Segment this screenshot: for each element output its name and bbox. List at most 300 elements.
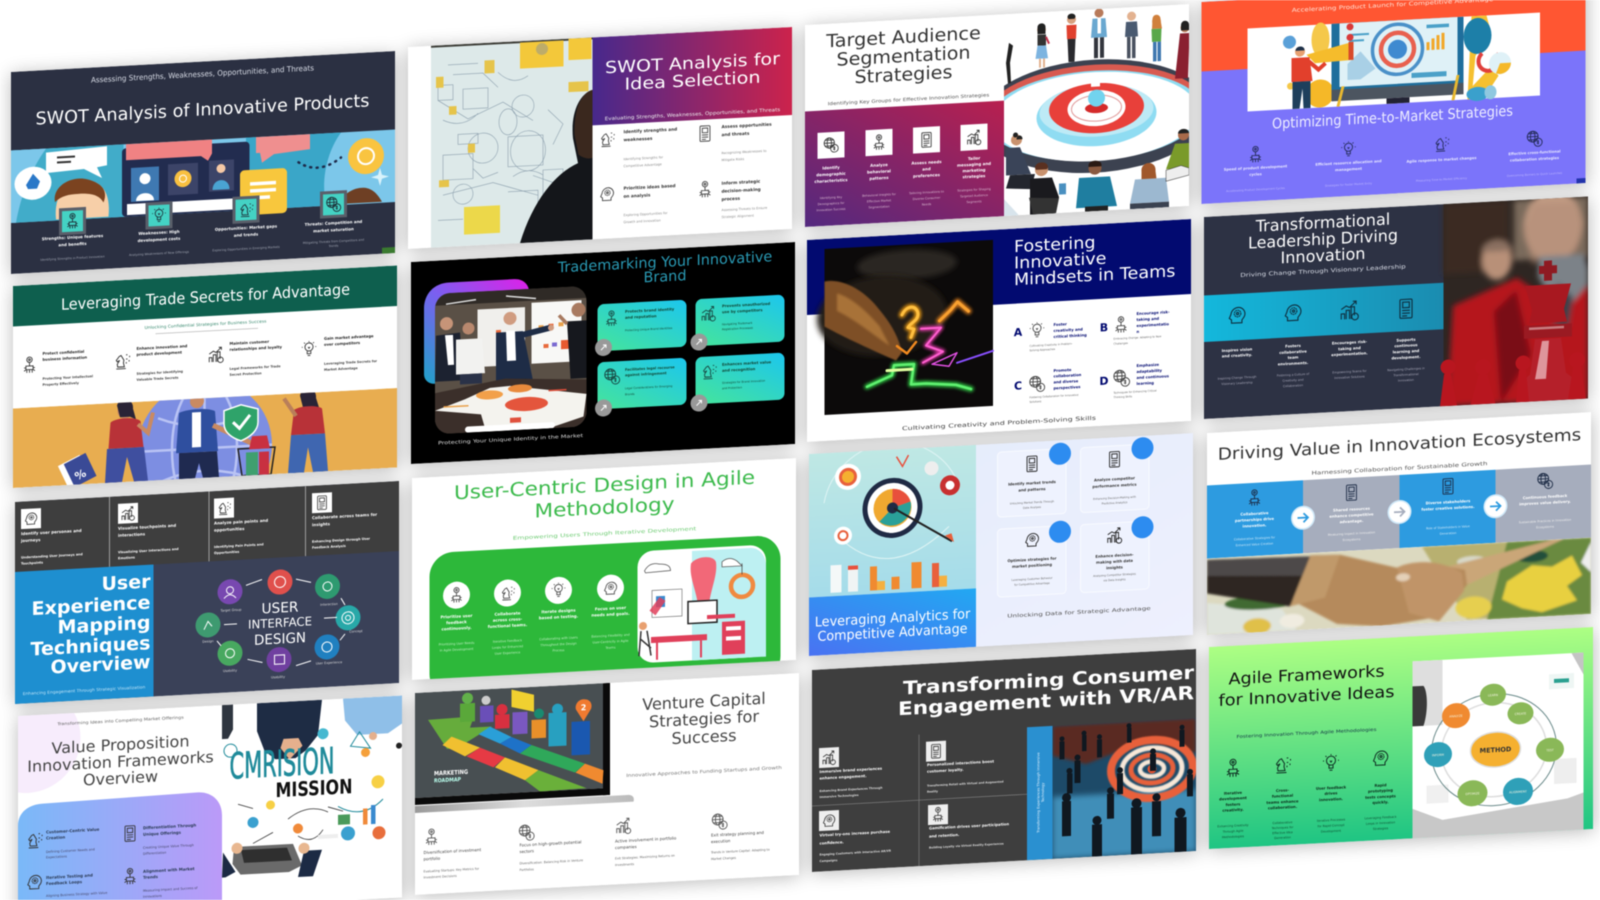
item 4 text — [722, 178, 767, 219]
column 2 text — [136, 344, 188, 382]
column 3 text — [230, 339, 283, 377]
icon 1 — [29, 833, 43, 848]
column 4 text: Teams — [605, 645, 616, 650]
icon tile 2 — [146, 201, 172, 230]
column 1 text — [1218, 347, 1256, 386]
column 1 text — [42, 349, 93, 387]
card 2: Predictive Analytics — [1102, 500, 1128, 506]
icon 3 — [1323, 754, 1339, 771]
card 3: Legal Considerations for Emerging — [625, 384, 673, 390]
item 3 text: Iterative Testing and — [46, 872, 93, 880]
cell 2 text: Visualizing User Interactions and — [118, 547, 179, 554]
slide: Leveraging Analytics — [809, 426, 1193, 656]
column 3 text: Iterate designs — [541, 607, 576, 614]
column 2 text: Cross- — [1276, 788, 1290, 793]
item 2 text: Unique Offerings — [143, 830, 182, 837]
column 3 text — [908, 159, 944, 207]
column 4 text: Tailor — [968, 155, 980, 161]
column 4 text: over competitors — [324, 341, 361, 347]
node labels: ANALYZE — [1449, 714, 1463, 719]
photo: whiteboard and person — [431, 37, 592, 248]
column 2 text: management — [1335, 167, 1362, 172]
item 2 text: Recognizing Weaknesses to — [722, 149, 766, 155]
diagram: user interface design cycle: User Experience — [316, 660, 342, 666]
item 2 text: Personalized interactions boost — [927, 760, 994, 767]
icon 4 — [125, 868, 135, 884]
card 4 — [1080, 516, 1154, 593]
slide: SWOT Analysis for Idea Selection — [408, 27, 792, 249]
item 1 text: Identifying Strengths for — [624, 155, 664, 161]
column 3 text — [1316, 785, 1347, 834]
subtitle: Fostering Innovation Through Agile Methodologies — [1237, 727, 1377, 740]
card 4: Strategies for Brand Innovation — [722, 379, 765, 385]
column 2 text: Generation — [1274, 835, 1291, 840]
subtitle: Identifying Key Groups for Effective Innovation Strategies — [828, 92, 990, 107]
strip vertical label — [1037, 752, 1045, 834]
title: for Innovative Ideas — [1219, 682, 1395, 710]
gradient panel — [805, 101, 1004, 227]
node labels: OPTIMIZE — [1465, 791, 1480, 796]
icon 2 — [1341, 141, 1356, 156]
column 1 text: Protect confidential — [43, 350, 84, 356]
title — [898, 663, 1195, 720]
icon 2 — [1285, 305, 1301, 321]
title — [1248, 209, 1398, 269]
column 3 text: experimentation. — [1331, 351, 1368, 357]
item 2 text: Differentiation — [143, 851, 166, 856]
column 4 text: learning and — [1393, 349, 1420, 354]
illustration: audience around target — [978, 2, 1212, 218]
column 1 text: continuously. — [441, 625, 472, 631]
column 4 text — [957, 155, 991, 205]
illustration: launch target screen — [1248, 11, 1540, 113]
cell 1 text: journeys — [20, 537, 41, 543]
column 3 text: Exit Strategies: Maximizing Returns on — [615, 853, 675, 861]
title: Venture Capital — [642, 689, 766, 714]
slide: Venture Capital Strategies — [415, 673, 799, 895]
subtitle: Innovative Approaches to Funding Startups and Growth — [626, 765, 782, 779]
icon 2 — [1276, 757, 1291, 773]
item 1 text: Immersive Technologies — [820, 793, 859, 799]
column 1 text: creativity. — [1222, 808, 1244, 813]
item 3 text — [46, 872, 107, 900]
column 2 text: across cross- — [493, 616, 523, 623]
item 1 text: Immersive brand experiences — [820, 767, 883, 774]
item 3 text: Feedback Loops — [46, 879, 83, 886]
column 3 text: preferences — [913, 172, 941, 179]
card 3: market positioning — [1012, 563, 1052, 569]
column 3 text — [615, 835, 677, 867]
column 4 text: Market Advantage — [324, 366, 359, 372]
column 1 text: Speed of product development — [1224, 164, 1287, 172]
column 3 text: companies — [615, 844, 637, 850]
icon 4 — [302, 341, 316, 356]
icon 4 — [700, 181, 710, 197]
item 2 text: Assess opportunities — [722, 122, 772, 130]
icon B — [1116, 316, 1126, 333]
card 4: Enhance decision- — [1095, 553, 1134, 559]
item 4 text: process — [722, 196, 740, 203]
node labels: TEST — [1545, 748, 1554, 753]
node labels: LEARN — [1488, 693, 1498, 697]
column 3 text: Legal Frameworks for Trade — [230, 364, 281, 371]
title — [605, 49, 780, 95]
item 3 text: on analysis — [624, 192, 651, 200]
card 1: Data Analysis — [1023, 505, 1042, 510]
column 3 text: Innovative Solutions — [1334, 374, 1365, 380]
title: SWOT Analysis of Innovative Products — [35, 91, 369, 130]
column 3 text: Process — [553, 648, 565, 653]
slide: Target Audience Segmentation — [805, 2, 1212, 227]
column 4 text: tests concepts — [1365, 794, 1397, 800]
column 3 text: Generation — [1440, 531, 1456, 536]
icon 4 — [712, 814, 727, 830]
column 4 text: Targeted Audience — [959, 193, 988, 199]
item 4 text: Innovations — [143, 894, 162, 899]
slide: Value Proposition Innovation Frameworks — [17, 695, 403, 900]
title: User — [102, 572, 151, 595]
column 4 text — [1519, 494, 1571, 530]
icon D — [1114, 370, 1130, 387]
subtitle: Unlocking Confidential Strategies for Business Success — [144, 318, 266, 330]
column 3 text: foster creative solutions. — [1421, 505, 1475, 512]
title — [30, 572, 151, 680]
label: opportunities — [214, 224, 278, 238]
column 1 text: Inspiring Change Through — [1218, 375, 1256, 381]
photo: neon path — [817, 240, 993, 415]
icon 3 — [1436, 137, 1449, 151]
item D text: adaptability — [1136, 369, 1163, 374]
cell 2 text: Visualize touchpoints and — [118, 523, 176, 531]
decorative corner — [18, 713, 80, 793]
title: Leadership Driving — [1248, 226, 1398, 253]
icon 4 — [1374, 751, 1388, 765]
icon circle 3 — [545, 576, 572, 605]
title — [557, 249, 772, 291]
column 2 text: teams enhance — [1266, 799, 1299, 805]
column 1 text: demographic — [816, 171, 846, 177]
header band — [13, 265, 397, 326]
column 4 text: Effective cross-functional — [1508, 149, 1561, 156]
column 2 text: Collaborative — [1273, 820, 1293, 825]
slide: User-Centric Design in Agile Methodology — [412, 458, 796, 699]
column 2 text: Valuable Trade Secrets — [137, 376, 179, 382]
title — [642, 689, 766, 750]
column 4 text: continuous — [1394, 343, 1418, 348]
footer caption: Unlocking Data for Strategic Advantage — [1007, 606, 1151, 620]
column 4 text: Exit strategy planning and — [711, 830, 764, 838]
column 4 text: User-Centricity in Agile — [593, 639, 629, 645]
item 3 text: confidence. — [820, 840, 844, 846]
column 1 text: Accelerating Product Development Cycles — [1226, 186, 1285, 193]
column 2 text: Portfolios — [520, 867, 534, 872]
column 4 text — [710, 830, 770, 861]
title: Strategies — [854, 62, 952, 88]
column 2 text — [862, 162, 897, 210]
illustration: monitor scene — [11, 130, 395, 228]
diagram: user interface design cycle: Design — [202, 639, 214, 644]
column 3 text: based on testing. — [539, 613, 579, 620]
column 1 text: Innovation Success — [817, 207, 846, 212]
label: weaknesses — [138, 229, 181, 243]
letter A: A — [1014, 326, 1023, 339]
icon tile 1 — [59, 207, 86, 235]
title: Optimizing Time-to-Market Strategies — [1272, 104, 1513, 133]
card 2 — [1080, 437, 1154, 513]
label: strengths: Strengths: Unique features — [42, 233, 104, 241]
title: Transformational — [1255, 210, 1390, 236]
column 3 text: Agile response to market changes — [1406, 156, 1477, 164]
column 4 text: Leveraging Trade Secrets for — [324, 359, 377, 366]
card 3: Leveraging Customer Behavior — [1012, 576, 1053, 582]
item 4 text: Inform strategic — [722, 179, 761, 187]
diagram: user interface design cycle: DESIGN — [254, 630, 306, 649]
column 1 text: Property Effectively — [43, 381, 80, 387]
blue strip — [1027, 726, 1052, 860]
tile 3 — [819, 810, 839, 831]
column 3 text: Investments — [615, 862, 635, 867]
subtitle: Accelerating Product Launch for Competitive Advantage — [1292, 0, 1494, 14]
column 3 text — [1421, 499, 1475, 537]
item C text: perspectives — [1054, 385, 1081, 391]
title: Innovative — [1014, 249, 1106, 273]
illustration panel: workspace — [638, 545, 766, 663]
column 2 text: Behavioral Insights for — [862, 192, 897, 198]
column 4 text: Leveraging Feedback — [1365, 815, 1397, 820]
card 1: Identify market trends — [1008, 480, 1057, 487]
item 1 text: weaknesses — [624, 136, 653, 143]
title: SWOT Analysis for — [605, 49, 780, 77]
label: threats: Threats: Competition and — [305, 219, 362, 227]
item 1 text: Enhancing Brand Experiences Through — [820, 786, 882, 793]
column 1 text: feedback — [446, 619, 467, 625]
item C text: Promote — [1054, 368, 1072, 373]
diagram: user interface design cycle — [196, 565, 363, 684]
column 2 text: functional teams. — [488, 622, 528, 629]
diagram: user interface design cycle: USER — [262, 600, 299, 618]
icon 2 — [519, 825, 534, 841]
orange top band — [1202, 0, 1586, 71]
label: weaknesses: Weaknesses: High — [138, 229, 180, 236]
title: Segmentation — [836, 42, 970, 71]
column 4 text: collaboration strategies — [1510, 156, 1559, 163]
subtitle: Assessing Strengths, Weaknesses, Opportunities, and Threats — [91, 63, 314, 85]
item 1 text: Expectations — [46, 854, 67, 860]
column 2 text: Effective Idea — [1272, 830, 1293, 835]
letter D: D — [1099, 375, 1109, 388]
title: Overview — [83, 768, 158, 790]
item 3 text: Virtual try-ons increase purchase — [820, 830, 890, 838]
column 4 text: Strategies for Shaping — [957, 187, 991, 193]
icon tile 4 — [320, 190, 347, 219]
cell 4 text: insights — [312, 521, 331, 527]
cell 4 text — [312, 512, 377, 550]
card 4: Enhances market value — [722, 360, 772, 367]
column 4 text: improves value delivery. — [1519, 500, 1571, 506]
header gradient — [592, 27, 792, 125]
discount tag glyph: % — [73, 467, 88, 483]
blue title panel — [15, 564, 154, 704]
column 2 text: Efficient resource allocation and — [1315, 159, 1382, 167]
column 3 text: innovation. — [1319, 797, 1344, 802]
column 1 text: Methodologies — [1222, 834, 1244, 839]
cell 1 text: Identify user personas and — [21, 528, 82, 536]
slide: SWOT Analysis of Innovative Products — [11, 51, 395, 274]
card 1: Unlocking Market Trends Through — [1010, 499, 1054, 506]
label: threats: market saturation — [313, 226, 354, 234]
item 4 text: Strategic Alignment — [722, 213, 755, 219]
column 3 text — [1331, 340, 1368, 380]
card 2: performance metrics — [1092, 483, 1137, 489]
column 4 text: Balancing Flexibility and — [591, 633, 630, 639]
item 4 text: Alignment with Market — [143, 866, 195, 874]
title: Mapping — [57, 613, 150, 639]
column 4 text: strategies — [963, 173, 986, 179]
title — [1218, 661, 1394, 710]
item B text: n — [1136, 330, 1139, 334]
column 4 text — [324, 334, 377, 372]
icon tile 4 — [960, 124, 988, 151]
title — [825, 23, 981, 90]
item 3 text: Growth and Innovation — [624, 218, 661, 224]
column 2 text: patterns — [869, 175, 889, 181]
slide: User Experience Mapping — [15, 481, 399, 704]
node labels: CREATE — [1515, 711, 1526, 716]
column 4 text: marketing — [962, 167, 986, 173]
column 2 text — [1266, 788, 1299, 841]
sketch word: MISSION — [276, 774, 352, 802]
column 3 text: Active involvement in portfolio — [615, 835, 677, 844]
column 2 text: behavioral — [867, 168, 892, 175]
column 2 text: User Experience — [495, 650, 520, 656]
gradient panel — [18, 791, 222, 900]
label: strengths — [41, 234, 104, 248]
item A text: Foster — [1054, 322, 1067, 327]
item B text — [1114, 310, 1170, 346]
item 3 text: Prioritize ideas based — [624, 183, 676, 192]
column 2 text: Segmentation — [868, 204, 890, 210]
title — [815, 606, 971, 645]
column 1 text: Visionary Leadership — [1221, 380, 1253, 386]
photo: leader and chess king — [1440, 188, 1588, 406]
card 2: Prevents unauthorized — [722, 302, 771, 308]
column 3 text: Secret Protection — [230, 371, 262, 377]
strip vertical label: Technology — [1041, 782, 1045, 803]
top band with four cells — [15, 481, 399, 572]
column 2 text: Iterative Feedback — [493, 638, 522, 644]
column 1 text — [1234, 511, 1276, 548]
column 4 text — [1387, 337, 1425, 383]
title: Experience — [32, 593, 150, 620]
title: Fostering — [1014, 233, 1095, 256]
subtitle: Driving Change Through Visionary Leadership — [1240, 264, 1406, 279]
column 1 text: cycles — [1249, 172, 1262, 177]
column 2 text: collaborative — [1279, 349, 1307, 355]
column 1 text — [424, 847, 482, 880]
column 1 text: Enhanced Value Creation — [1236, 541, 1273, 547]
column 2 text: Collaborate — [494, 610, 521, 617]
title: Idea Selection — [624, 68, 761, 94]
photo: method cycle diagram on paper — [1412, 653, 1584, 838]
subtitle: Empowering Users Through Iterative Development — [513, 526, 696, 542]
column 3 text: relationships and loyalty — [230, 345, 283, 352]
title: Transforming Consumer — [903, 663, 1195, 700]
item D text — [1114, 362, 1170, 399]
column 4 text: Loops in Innovation — [1366, 820, 1395, 826]
cell 2 text: interactions — [118, 531, 146, 538]
node labels — [1432, 690, 1554, 798]
icon A — [1030, 322, 1044, 337]
icon 3 — [28, 875, 41, 889]
column 2 text: Measuring Impact in Innovation — [1328, 530, 1375, 537]
column 3 text: Role of Stakeholders in Value — [1426, 524, 1470, 531]
item B text: Encourage risk- — [1136, 310, 1170, 316]
column 1 text: in Agile Development — [440, 647, 474, 653]
card 4: and Protection — [722, 385, 742, 390]
column 2 text: enhance competitive — [1329, 512, 1374, 519]
column 3 text: and — [922, 166, 931, 172]
diagram: user interface design cycle: Interaction — [320, 602, 338, 607]
column 1 text: Identify — [822, 165, 840, 171]
diagram: user interface design cycle: Usability — [271, 675, 285, 680]
card 2: Analyze competitor — [1094, 476, 1135, 482]
card 4: insights — [1106, 565, 1124, 570]
column 2 text: Analyze — [870, 162, 888, 168]
card 1 — [998, 442, 1071, 517]
title: Competitive Advantage — [817, 621, 967, 645]
column 1 text: Prioritize user — [441, 613, 473, 620]
item A text — [1030, 321, 1087, 352]
column 2 text: collaboration. — [1268, 805, 1298, 810]
column 3 text: Collaborating with Users — [539, 635, 578, 641]
title: Driving Value in Innovation Ecosystems — [1218, 425, 1581, 464]
column 1 text: Inspires vision — [1222, 347, 1253, 353]
column 4 text: Navigating Challenges in — [1387, 366, 1425, 372]
column 1 text: Prioritizing User Needs — [439, 641, 475, 647]
title: Brand — [643, 268, 686, 286]
captions: Analyzing Weaknesses of New Offerings — [129, 250, 189, 257]
column 1 text: and creativity. — [1222, 353, 1253, 359]
icon C — [1030, 376, 1045, 392]
label: opportunities: Opportunities: Market gaps — [215, 223, 278, 232]
tile 4 — [928, 804, 948, 825]
column 3 text: Measuring Time-to-Market Efficiency — [1416, 176, 1467, 183]
item 3 text — [820, 830, 892, 863]
icon 3 — [209, 347, 223, 363]
sketch word: CMRISION — [230, 741, 335, 788]
item D text: Thinking Skills — [1114, 394, 1133, 399]
gradient halo — [424, 278, 529, 384]
item 4 text: Building Loyalty via Virtual Reality Experiences — [929, 842, 1004, 850]
column 3 text: Assess needs — [911, 159, 942, 166]
item 2 text: Creating Unique Value Through — [143, 843, 194, 850]
title: Overview — [50, 652, 150, 679]
label: strengths: and benefits — [58, 241, 87, 247]
column 2 text — [488, 610, 528, 656]
item 2 text: Mitigate Risks — [722, 157, 744, 162]
slide: Fostering Innovative Mindsets — [807, 219, 1191, 442]
item 1 text — [624, 127, 677, 168]
green panel — [430, 535, 780, 698]
column 4 text: Trends in Venture Capital: Adapting to — [710, 848, 770, 855]
slide: Transformational Leadership — [1204, 188, 1588, 419]
cell 4 text: Enhancing Design through User — [312, 537, 370, 544]
item 1 text: enhance engagement. — [820, 774, 867, 781]
captions: Identifying Strengths in Product Innovation — [40, 254, 105, 262]
item 4 text: and retention. — [929, 833, 960, 839]
card 2: Enhancing Decision-Making with — [1093, 495, 1136, 501]
column 2 text: Creativity and — [1282, 378, 1304, 383]
